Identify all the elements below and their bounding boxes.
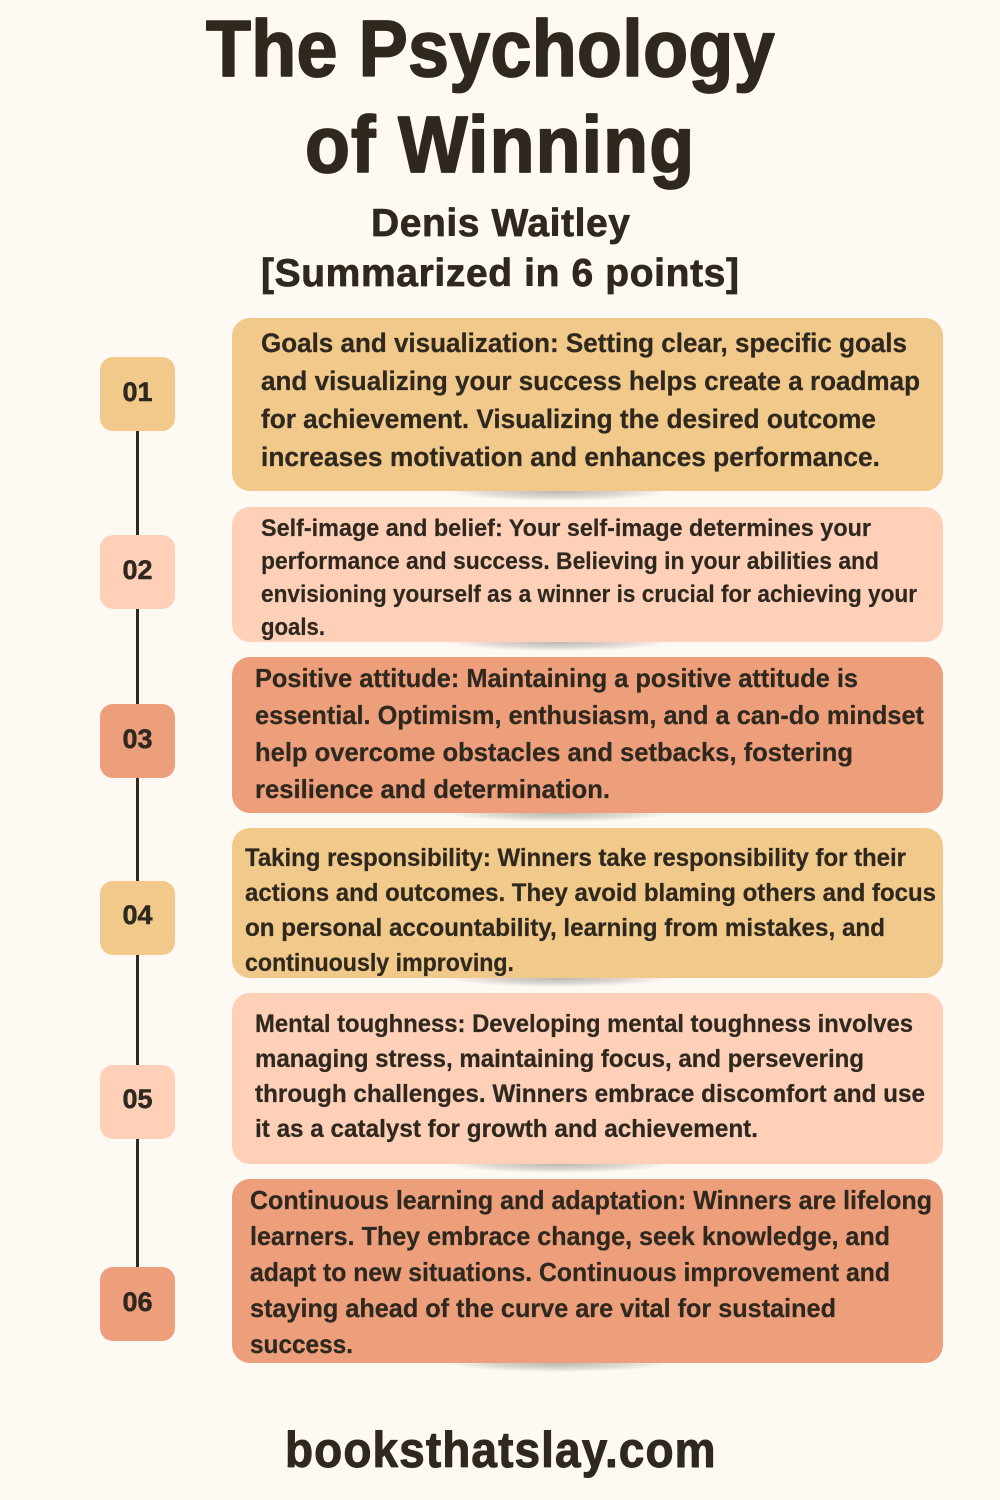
panel: taking responsibility: continuously improving.: [245, 949, 514, 977]
panel: mental toughness: through challenges. Winners embrace discomfort and use: [255, 1080, 925, 1108]
panel: taking responsibility: on personal accountability, learning from mistakes, and: [245, 914, 885, 942]
panel: continuous learning and adaptation: Continuous learning and adaptation: Winners are lifelong: [250, 1185, 932, 1215]
number badge 05: [100, 1065, 175, 1139]
title: The Psychology: [206, 4, 775, 94]
number badge 02: 02: [122, 555, 153, 585]
panel: self-image and belief: goals.: [261, 614, 325, 641]
timeline connector: [136, 431, 139, 1267]
number badge 04: [100, 881, 175, 955]
panel: continuous learning and adaptation: [232, 1179, 943, 1372]
panel: continuous learning and adaptation: adapt to new situations. Continuous improvement and: [250, 1257, 890, 1287]
panel: goals and visualization: and visualizing your success helps create a roadmap: [261, 366, 920, 396]
panel: taking responsibility: [232, 828, 943, 987]
subtitle: Denis Waitley: [371, 202, 630, 245]
panel: self-image and belief: [232, 507, 943, 651]
number badge 04: 04: [122, 900, 153, 930]
number badge 03: 03: [122, 724, 153, 754]
number badge 01: 01: [122, 377, 153, 407]
panel: positive attitude: Positive attitude: Maintaining a positive attitude is: [255, 663, 858, 693]
panel: self-image and belief: envisioning yourself as a winner is crucial for achieving your: [261, 581, 917, 608]
number badge 02: [100, 535, 175, 609]
subtitle: [Summarized in 6 points]: [261, 252, 739, 295]
number badge 01: [100, 357, 175, 431]
panel: mental toughness: it as a catalyst for growth and achievement.: [255, 1115, 758, 1143]
panel: mental toughness: Mental toughness: Developing mental toughness involves: [255, 1010, 913, 1038]
panel: positive attitude: help overcome obstacles and setbacks, fostering: [255, 737, 853, 767]
title: [206, 4, 775, 190]
panel: continuous learning and adaptation: staying ahead of the curve are vital for sustained: [250, 1293, 836, 1323]
panel: mental toughness: managing stress, maintaining focus, and persevering: [255, 1045, 864, 1073]
panel: self-image and belief: performance and success. Believing in your abilities and: [261, 548, 879, 575]
panel: positive attitude: resilience and determination.: [255, 774, 610, 804]
panel: taking responsibility: actions and outcomes. They avoid blaming others and focus: [245, 879, 936, 907]
footer website: booksthatslay.com: [285, 1423, 716, 1478]
panel: continuous learning and adaptation: success.: [250, 1329, 353, 1359]
number badge 06: 06: [122, 1287, 153, 1317]
panel: goals and visualization: for achievement. Visualizing the desired outcome: [261, 404, 876, 434]
panel: goals and visualization: increases motivation and enhances performance.: [261, 442, 880, 472]
number badge 03: [100, 704, 175, 778]
panel: continuous learning and adaptation: learners. They embrace change, seek knowledge, and: [250, 1221, 890, 1251]
panel: positive attitude: essential. Optimism, enthusiasm, and a can-do mindset: [255, 700, 924, 730]
panel: mental toughness: [232, 993, 943, 1173]
panel: goals and visualization: [232, 318, 943, 501]
title: of Winning: [305, 100, 694, 190]
subtitle: [261, 202, 739, 295]
panel: goals and visualization: Goals and visualization: Setting clear, specific goals: [261, 328, 907, 358]
panel: positive attitude: [232, 657, 943, 822]
number badge 05: 05: [122, 1084, 153, 1114]
panel: taking responsibility: Taking responsibility: Winners take responsibility for their: [245, 844, 906, 872]
number badge 06: [100, 1267, 175, 1341]
panel: self-image and belief: Self-image and belief: Your self-image determines your: [261, 515, 871, 542]
